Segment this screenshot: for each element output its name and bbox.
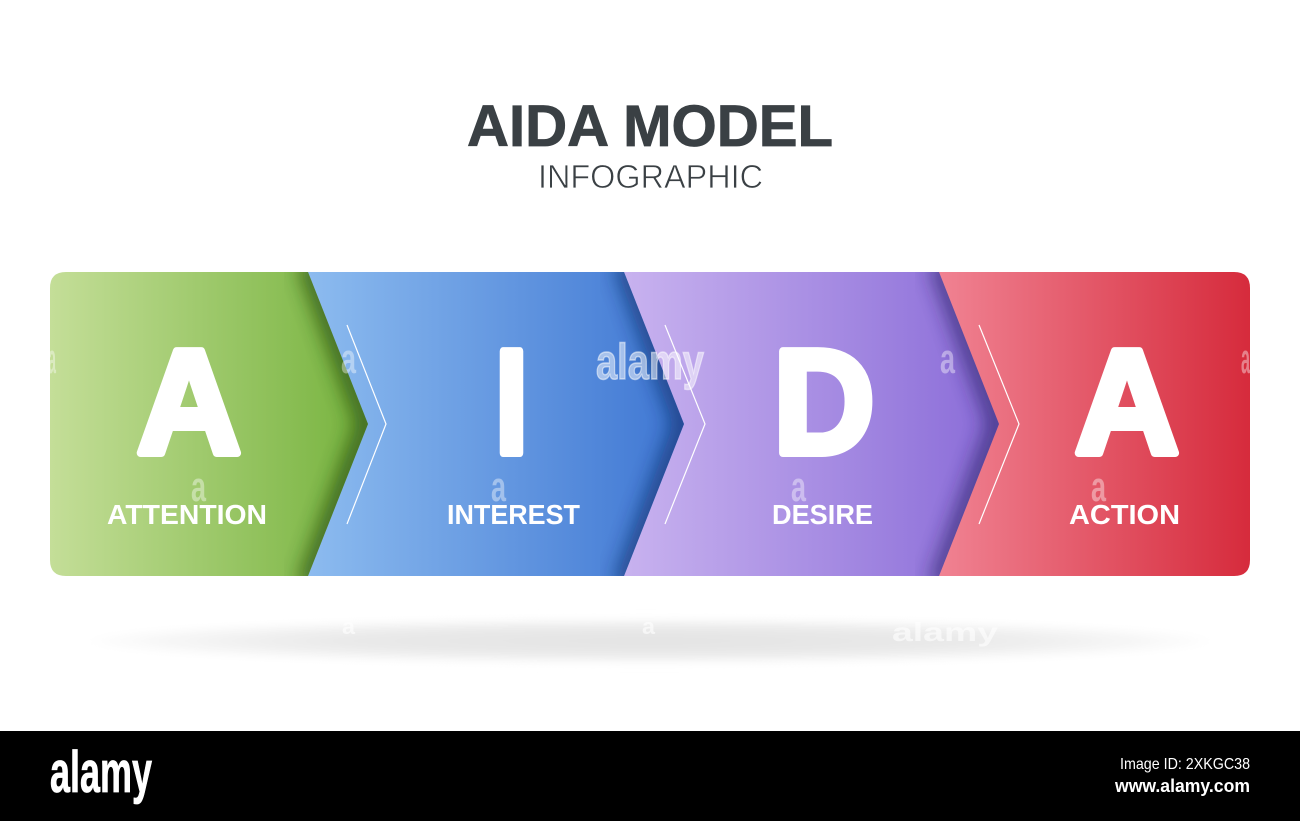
website: www.alamy.com (1114, 776, 1250, 796)
watermark marks along panel row: a (791, 463, 806, 510)
panel: desire (615, 262, 999, 586)
label: INTEREST: INTEREST (447, 499, 580, 530)
panel: action (900, 272, 1250, 576)
heading: AIDA MODEL: AIDA MODEL (467, 94, 833, 159)
footer background (0, 731, 1300, 821)
title block (467, 94, 833, 195)
watermark marks over ground shadow: alamy (892, 617, 999, 647)
desire edge shadow (939, 262, 999, 586)
footer logo: alamy (50, 740, 152, 805)
letter A: A (1075, 320, 1179, 485)
letter I: I (495, 320, 528, 485)
watermark marks along panel row: a (1091, 463, 1106, 510)
letter D: D (774, 320, 874, 485)
subheading: INFOGRAPHIC: INFOGRAPHIC (538, 158, 763, 195)
watermark marks along panel row: a (48, 335, 56, 382)
interest edge shadow (624, 262, 684, 586)
arrow: attention to interest (347, 325, 386, 524)
label: DESIRE: DESIRE (772, 499, 873, 530)
watermark: centre logo: alamy (596, 334, 704, 390)
watermark marks along panel row (48, 335, 1250, 510)
image id: Image ID: 2XKGC38 (1120, 756, 1250, 773)
watermark marks over ground shadow: a (642, 614, 656, 639)
watermark marks over ground shadow (342, 614, 999, 647)
action background (900, 272, 1250, 576)
ground shadow (80, 618, 1220, 664)
watermark overlays (48, 334, 1250, 647)
attention edge shadow (308, 262, 368, 586)
panel: interest (300, 262, 684, 586)
arrow: interest to desire (665, 325, 705, 524)
arrow: desire to action (979, 325, 1019, 524)
watermark marks over ground shadow: a (342, 614, 356, 639)
attention background (50, 272, 368, 576)
letter A: A (137, 320, 241, 485)
interest background (300, 272, 684, 576)
watermark marks along panel row: a (341, 335, 356, 382)
watermark marks along panel row: a (191, 463, 206, 510)
watermark marks along panel row: a (940, 335, 955, 382)
desire background (615, 272, 999, 576)
panel: attention (50, 262, 368, 586)
infographic canvas: a (1241, 335, 1250, 382)
label: ACTION: ACTION (1069, 499, 1180, 530)
label: ATTENTION: ATTENTION (107, 499, 267, 530)
watermark marks along panel row: a (491, 463, 506, 510)
footer bar (0, 731, 1300, 821)
